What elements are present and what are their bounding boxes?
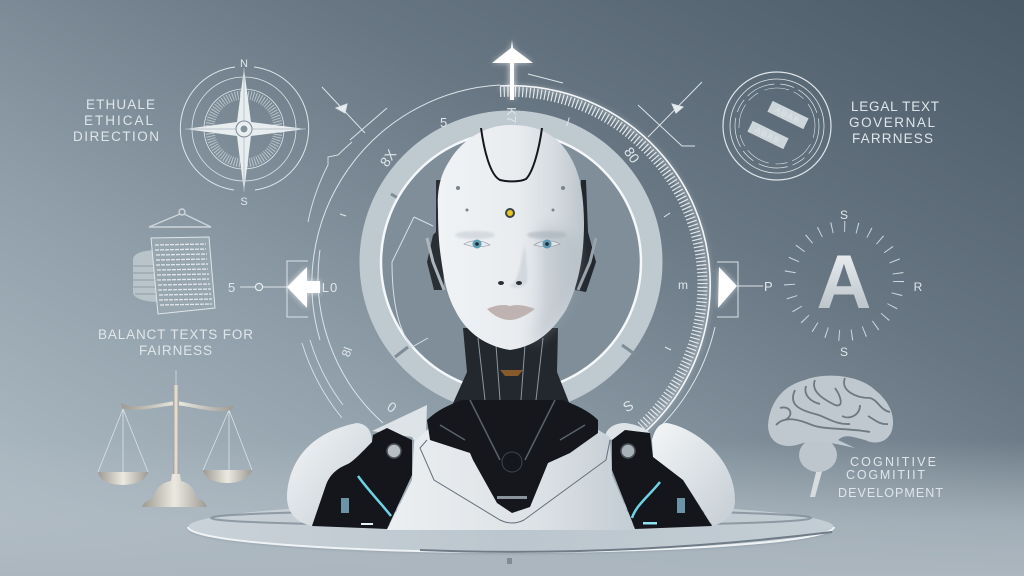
- collar panels: [372, 405, 650, 444]
- forehead yellow sensor: [505, 208, 515, 218]
- letter A dial: A: [817, 240, 871, 325]
- text: ethical direction: ETHUALE: [86, 97, 155, 112]
- diagonal markers: [322, 74, 702, 146]
- lips: [487, 305, 535, 320]
- text: cognitive development: COGNITIVE: [850, 455, 936, 469]
- letter A dial: [790, 208, 923, 359]
- text: cognitive development: [838, 455, 943, 500]
- dial labels: 0: [384, 398, 400, 416]
- crown panel: [481, 128, 542, 181]
- dial labels: 80: [621, 144, 643, 166]
- face shading: [455, 225, 581, 346]
- text: cognitive development: DEVELOPMENT: [838, 486, 943, 500]
- dial labels: L0: [322, 280, 338, 295]
- left eye: [464, 240, 490, 248]
- legal text emblem: [723, 72, 831, 180]
- brain: [768, 376, 893, 497]
- letter A dial: S: [840, 208, 848, 222]
- dial labels: m: [678, 278, 688, 292]
- text: balance texts for fairness: [98, 327, 253, 358]
- head: [438, 125, 584, 350]
- chest seam: [420, 440, 610, 523]
- dial labels: S: [620, 397, 636, 415]
- dial labels: /: [566, 115, 570, 129]
- text: legal text governal farrness: GOVERNAL: [849, 115, 935, 130]
- dial labels: K7: [504, 107, 519, 123]
- right eye: [534, 240, 560, 248]
- left arrow marker: 5: [228, 280, 235, 295]
- neck collar: [427, 400, 598, 513]
- tick dial arc: [302, 85, 715, 432]
- text: ethical direction: [73, 97, 159, 144]
- platform: [188, 502, 834, 564]
- text: cognitive development: COGMITIIT: [846, 468, 925, 482]
- nose: [498, 245, 527, 288]
- left arm mechanism: [312, 428, 412, 529]
- dial labels: 5: [440, 115, 447, 130]
- text: ethical direction: ETHICAL: [84, 113, 153, 128]
- legal text emblem: ABAB: [754, 125, 782, 145]
- text: balance texts for fairness: BALANCT TEXTS FOR: [98, 327, 253, 342]
- balance scale: [98, 370, 252, 507]
- document icon: [133, 209, 215, 314]
- chest: [387, 420, 635, 530]
- compass icon: N: [240, 58, 248, 70]
- letter A dial: R: [914, 280, 923, 294]
- right arm mechanism: [612, 430, 712, 529]
- outer light ring: [370, 121, 652, 403]
- neck: [450, 328, 572, 410]
- central hud rings: [370, 121, 652, 403]
- ears: [427, 180, 596, 292]
- compass icon: [180, 58, 309, 208]
- text: ethical direction: DIRECTION: [73, 129, 159, 144]
- robot: [287, 125, 735, 530]
- compass icon: S: [240, 196, 248, 208]
- text: balance texts for fairness: FAIRNESS: [139, 343, 212, 358]
- letter A dial: S: [840, 345, 848, 359]
- right arrow marker: [717, 262, 773, 317]
- coin stack: [133, 250, 160, 302]
- head bolts: [456, 186, 565, 212]
- text: legal text governal farrness: FARRNESS: [852, 131, 933, 146]
- left arrow marker: [228, 261, 320, 317]
- text: legal text governal farrness: LEGAL TEXT: [851, 99, 939, 114]
- legal text emblem: ABAB: [774, 105, 802, 125]
- right arrow marker: P: [764, 279, 773, 294]
- right shoulder: [652, 423, 735, 526]
- dial labels: 8l: [339, 345, 355, 359]
- top arrow: [492, 40, 533, 100]
- text: legal text governal farrness: [849, 99, 939, 146]
- dial labels: 8X: [377, 146, 400, 170]
- dial labels: [322, 107, 688, 416]
- left shoulder: [287, 423, 372, 526]
